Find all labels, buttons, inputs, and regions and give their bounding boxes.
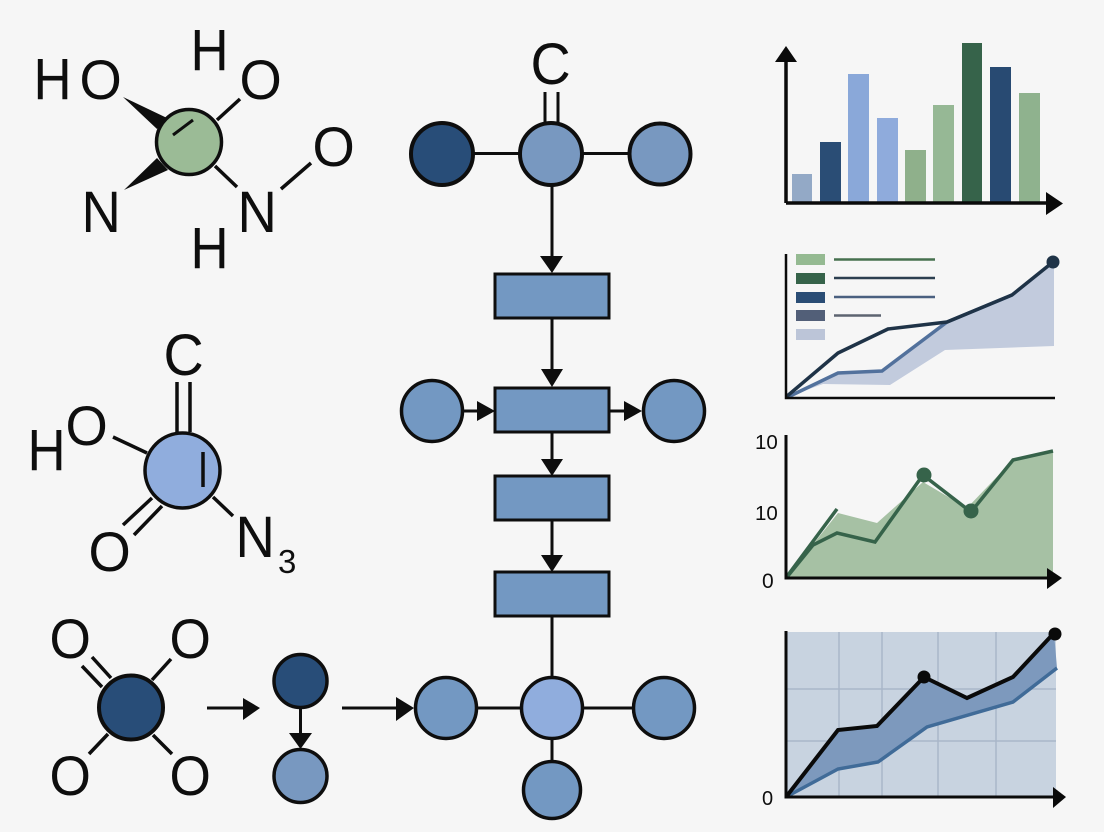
molecule: top left: O xyxy=(312,115,355,178)
molecule: top left xyxy=(34,18,355,281)
molecule: top left: O xyxy=(80,48,122,111)
molecule: bottom left: O xyxy=(50,608,91,670)
grid line chart xyxy=(762,628,1066,810)
molecule: bottom left xyxy=(50,608,211,807)
molecule: bottom left: O xyxy=(170,608,211,670)
molecule: top left: H xyxy=(190,216,229,281)
line chart with legend xyxy=(786,254,1060,398)
flowchart xyxy=(402,33,704,818)
area chart xyxy=(755,431,1062,593)
area chart: 0 xyxy=(762,570,774,593)
molecule: top left: H xyxy=(34,47,72,112)
molecule: middle left: O xyxy=(66,394,108,457)
reaction arrows and small molecule xyxy=(207,654,414,802)
molecule: top left: N xyxy=(238,179,277,244)
grid line chart: 0 xyxy=(762,788,773,810)
molecule: top left: H xyxy=(190,18,229,83)
area chart: 10 xyxy=(755,431,778,454)
molecule: top left: O xyxy=(240,48,282,111)
molecule: middle left: H xyxy=(28,418,66,483)
bar chart xyxy=(775,43,1063,215)
flowchart: C xyxy=(530,33,571,97)
molecule: bottom left: O xyxy=(170,745,211,807)
molecule: middle left: 3 xyxy=(278,543,296,580)
molecule: bottom left: O xyxy=(50,745,91,807)
molecule: middle left: C xyxy=(164,324,204,388)
molecule: middle left xyxy=(28,324,296,583)
area chart: 10 xyxy=(755,502,778,525)
molecule: top left: N xyxy=(82,179,121,244)
molecule: middle left: O xyxy=(88,520,131,583)
molecule: middle left: N xyxy=(236,504,275,569)
